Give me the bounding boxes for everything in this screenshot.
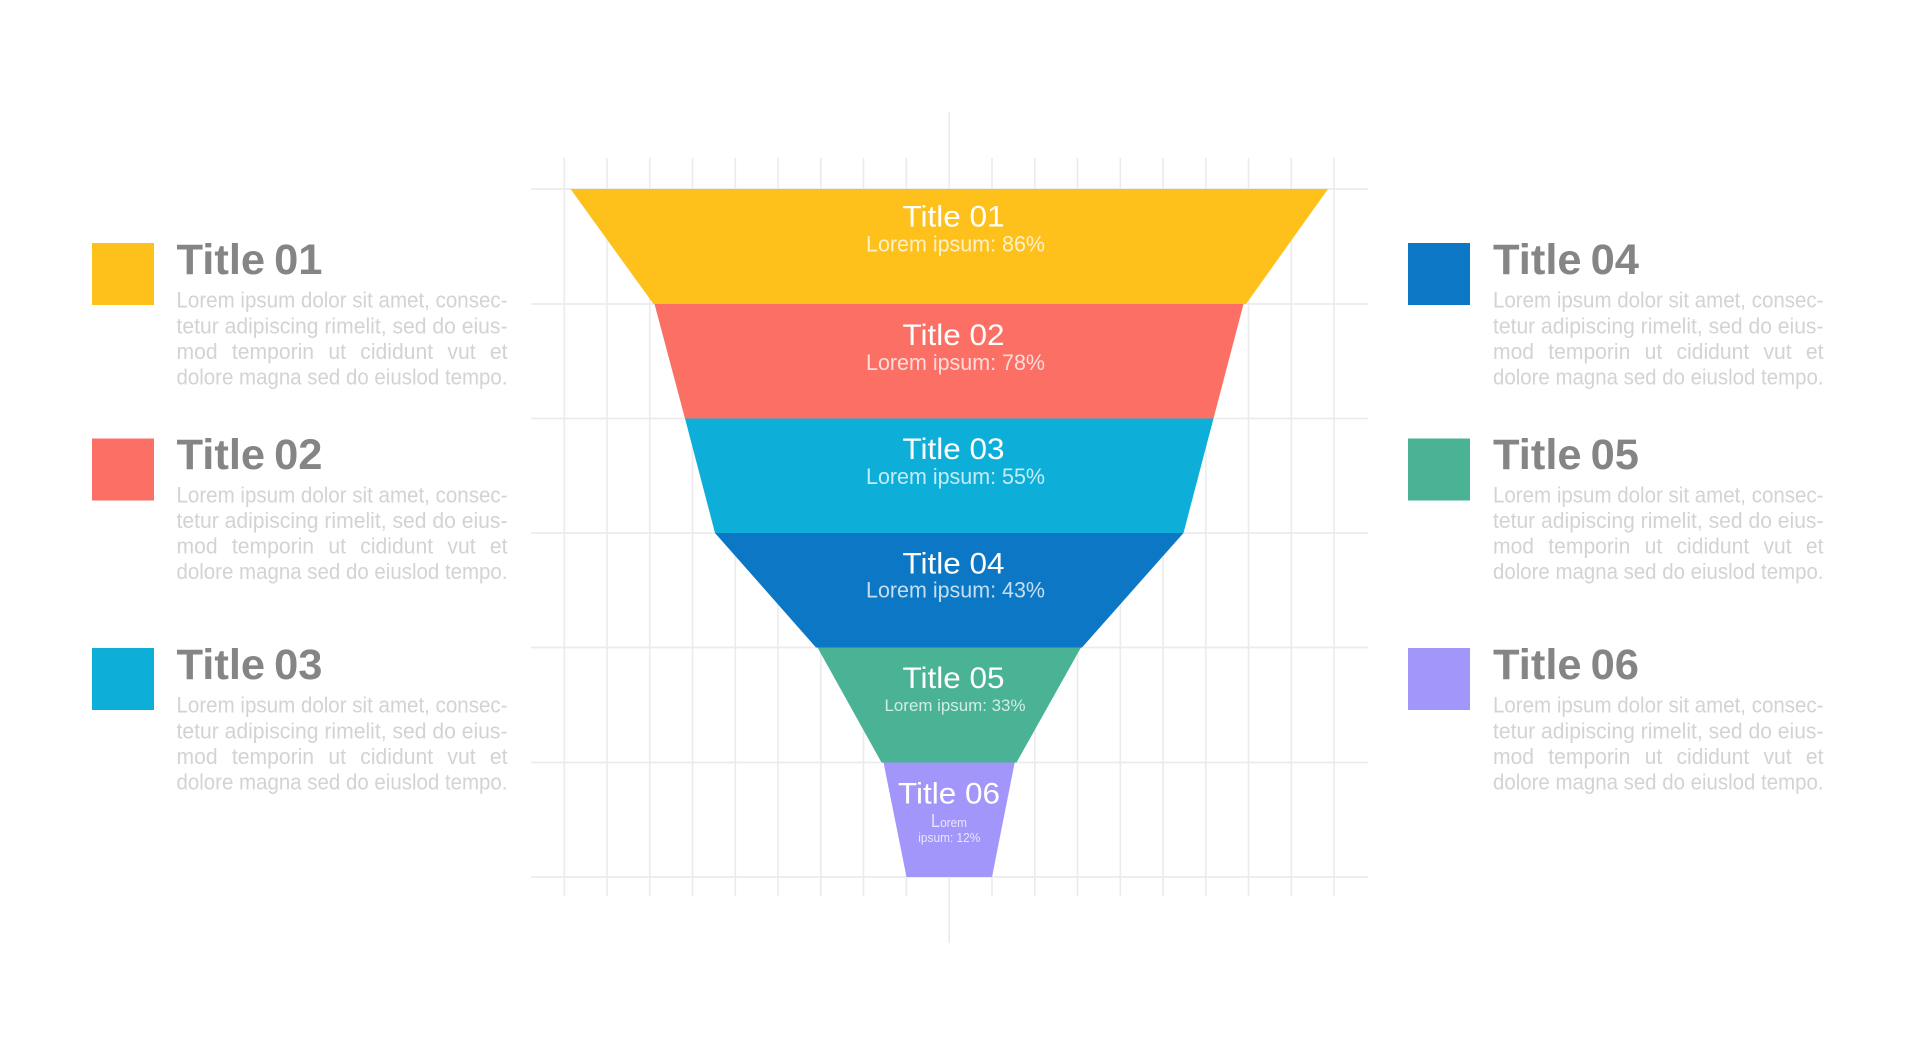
description 02: mod temporin ut cididunt vut et — [176, 534, 508, 558]
description 01 — [176, 288, 508, 390]
legend item: Title 01 — [92, 236, 508, 390]
funnel band 05 — [818, 648, 1081, 762]
legend item: Title 06 — [1408, 641, 1824, 794]
description 04: dolore magna sed do eiuslod tempo. — [1493, 364, 1824, 390]
heading 03: Title 03 — [176, 641, 322, 689]
funnel band 01: Title 01 — [902, 201, 1004, 234]
legend item: Title 05 — [1408, 431, 1824, 584]
description 03 — [176, 692, 508, 794]
description 02: dolore magna sed do eiuslod tempo. — [176, 559, 508, 584]
description 04: tetur adipiscing rimelit, sed do eius- — [1493, 314, 1824, 338]
color swatch 02 — [92, 438, 154, 500]
description 02 — [176, 482, 508, 584]
heading 02: Title 02 — [176, 431, 322, 479]
funnel band 05: Title 05 — [902, 662, 1004, 695]
funnel band 02 — [654, 304, 1244, 418]
description 02: Lorem ipsum dolor sit amet, consec- — [176, 482, 508, 508]
funnel band 01 — [570, 189, 1328, 304]
description 01: mod temporin ut cididunt vut et — [176, 339, 508, 364]
funnel band 04: Lorem ipsum: 43% — [866, 578, 1045, 603]
funnel band 05: Lorem ipsum: 33% — [884, 696, 1026, 715]
funnel band 02: Lorem ipsum: 78% — [866, 350, 1045, 375]
color swatch 06 — [1408, 648, 1470, 710]
funnel band 03: Title 03 — [902, 433, 1004, 466]
funnel band 03: Lorem ipsum: 55% — [866, 464, 1045, 489]
funnel band 03 — [685, 418, 1214, 533]
description 01: Lorem ipsum dolor sit amet, consec- — [176, 288, 508, 312]
funnel band 04 — [715, 533, 1184, 648]
color swatch 03 — [92, 648, 154, 710]
funnel band 06: Lorem — [931, 811, 967, 831]
funnel band 06: Title 06 — [898, 777, 1000, 810]
funnel band 06: ipsum: 12% — [918, 831, 980, 845]
description 04: mod temporin ut cididunt vut et — [1493, 339, 1824, 364]
description 06 — [1493, 692, 1824, 794]
description 03: dolore magna sed do eiuslod tempo. — [176, 770, 508, 794]
color swatch 05 — [1408, 438, 1470, 500]
description 05 — [1493, 482, 1824, 584]
description 03: mod temporin ut cididunt vut et — [176, 744, 508, 769]
heading 04: Title 04 — [1493, 236, 1639, 284]
funnel band 04: Title 04 — [902, 548, 1004, 581]
color swatch 01 — [92, 243, 154, 305]
description 06: tetur adipiscing rimelit, sed do eius- — [1493, 718, 1824, 744]
funnel band 01: Lorem ipsum: 86% — [866, 232, 1045, 257]
description 04 — [1493, 288, 1824, 390]
background grid — [531, 112, 1368, 943]
description 05: dolore magna sed do eiuslod tempo. — [1493, 559, 1824, 584]
legend item: Title 02 — [92, 431, 508, 584]
description 03: tetur adipiscing rimelit, sed do eius- — [176, 718, 508, 744]
color swatch 04 — [1408, 243, 1470, 305]
description 05: mod temporin ut cididunt vut et — [1493, 534, 1824, 558]
description 03: Lorem ipsum dolor sit amet, consec- — [176, 692, 508, 718]
funnel chart — [570, 189, 1328, 877]
description 04: Lorem ipsum dolor sit amet, consec- — [1493, 288, 1824, 312]
description 06: Lorem ipsum dolor sit amet, consec- — [1493, 692, 1824, 718]
funnel band 02: Title 02 — [902, 319, 1004, 352]
funnel band 06 — [884, 762, 1015, 877]
description 01: tetur adipiscing rimelit, sed do eius- — [176, 314, 508, 338]
description 06: mod temporin ut cididunt vut et — [1493, 744, 1824, 769]
heading 01: Title 01 — [176, 236, 322, 284]
heading 05: Title 05 — [1493, 431, 1639, 479]
legend item: Title 03 — [92, 641, 508, 794]
legend item: Title 04 — [1408, 236, 1824, 390]
description 06: dolore magna sed do eiuslod tempo. — [1493, 770, 1824, 794]
description 02: tetur adipiscing rimelit, sed do eius- — [176, 508, 508, 533]
description 05: tetur adipiscing rimelit, sed do eius- — [1493, 508, 1824, 533]
heading 06: Title 06 — [1493, 641, 1639, 689]
description 05: Lorem ipsum dolor sit amet, consec- — [1493, 482, 1824, 508]
description 01: dolore magna sed do eiuslod tempo. — [176, 364, 508, 390]
